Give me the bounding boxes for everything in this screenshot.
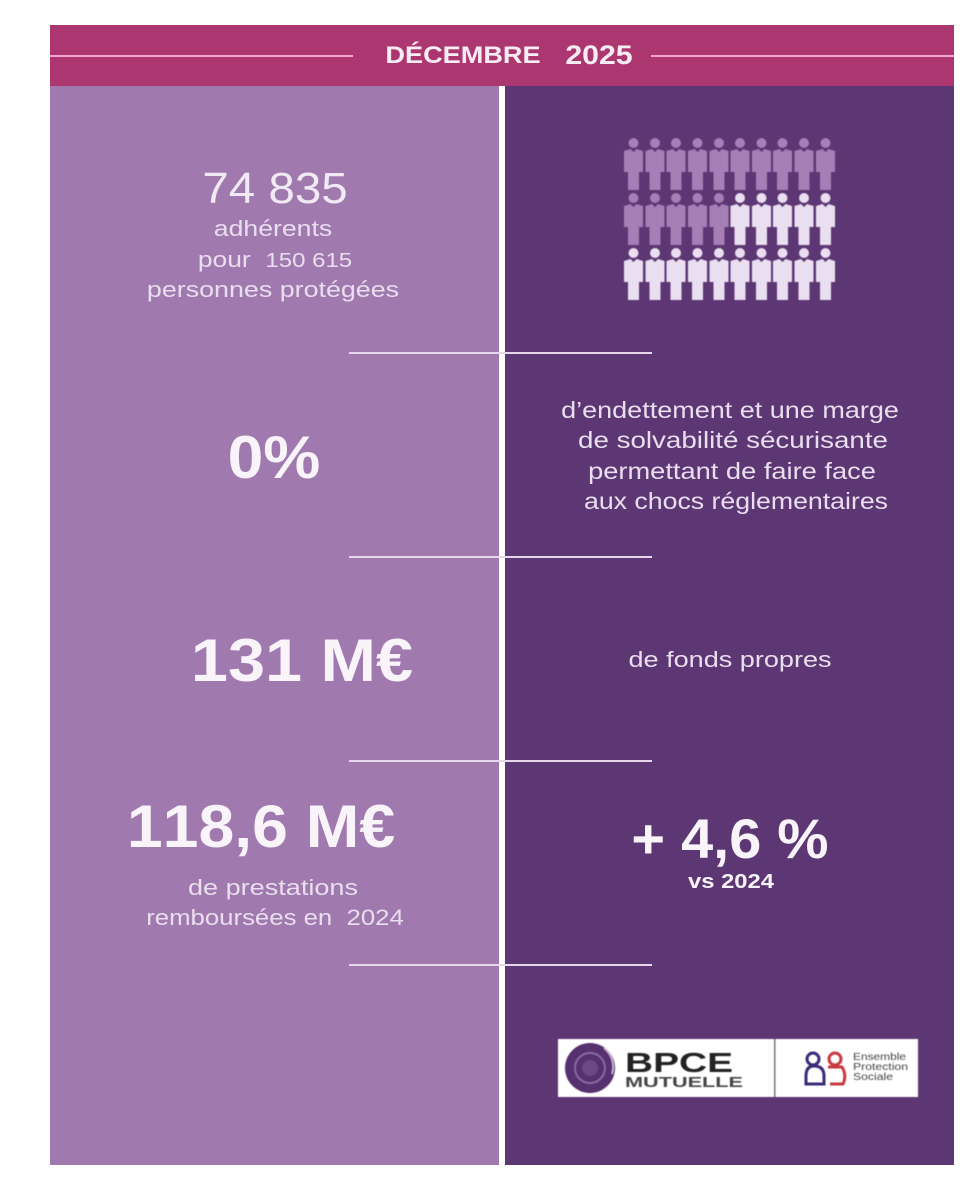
logo text: BPCE: BPCE	[625, 1047, 733, 1078]
header rule left	[50, 55, 353, 57]
logo text: Mutuelle: MUTUELLE	[625, 1074, 743, 1091]
icon: BPCE swirl	[565, 1043, 615, 1093]
logo: BPCE Mutuelle and Ensemble Protection Sociale	[557, 1038, 919, 1098]
stat: equity: 131 M€	[191, 627, 413, 694]
panel: left column	[50, 86, 499, 1165]
logo text: Ensemble Protection Sociale	[853, 1052, 908, 1083]
text: benefits label line 1: de prestations	[188, 875, 358, 900]
header title year: 2025	[565, 40, 632, 70]
text: adherents: adhérents	[213, 216, 332, 241]
stat: zero debt: 0%	[228, 424, 320, 491]
text: equity label: de fonds propres	[628, 647, 832, 672]
central divider	[499, 86, 505, 1165]
stat: benefits paid: 118,6 M€	[127, 793, 395, 860]
logo text: Ensemble Protection Sociale: Ensemble	[853, 1052, 907, 1063]
header rule right	[651, 55, 954, 57]
logo text: Ensemble Protection Sociale: Protection	[853, 1062, 908, 1073]
text: protected people: personnes protégées	[146, 277, 399, 302]
text: benefits label line 2: remboursées en 2024	[146, 905, 403, 930]
stat: members count: 74 835	[202, 164, 347, 213]
text: versus 2024: vs 2024	[688, 871, 774, 893]
text line 4: aux chocs réglementaires	[584, 488, 888, 514]
header title month: DÉCEMBRE	[385, 42, 540, 69]
text: debt description	[561, 397, 899, 514]
text line 2: de solvabilité sécurisante	[578, 427, 888, 453]
stat: growth: + 4,6 %	[631, 807, 828, 870]
panel: right column	[505, 86, 954, 1165]
icon: two people	[806, 1053, 845, 1084]
text: protected people count: pour 150 615	[197, 247, 352, 272]
icon: people pictogram	[623, 138, 836, 301]
text line 1: d’endettement et une marge	[561, 397, 899, 423]
text line 3: permettant de faire face	[588, 458, 876, 484]
logo text: Ensemble Protection Sociale: Sociale	[853, 1072, 894, 1083]
header band	[50, 25, 954, 86]
